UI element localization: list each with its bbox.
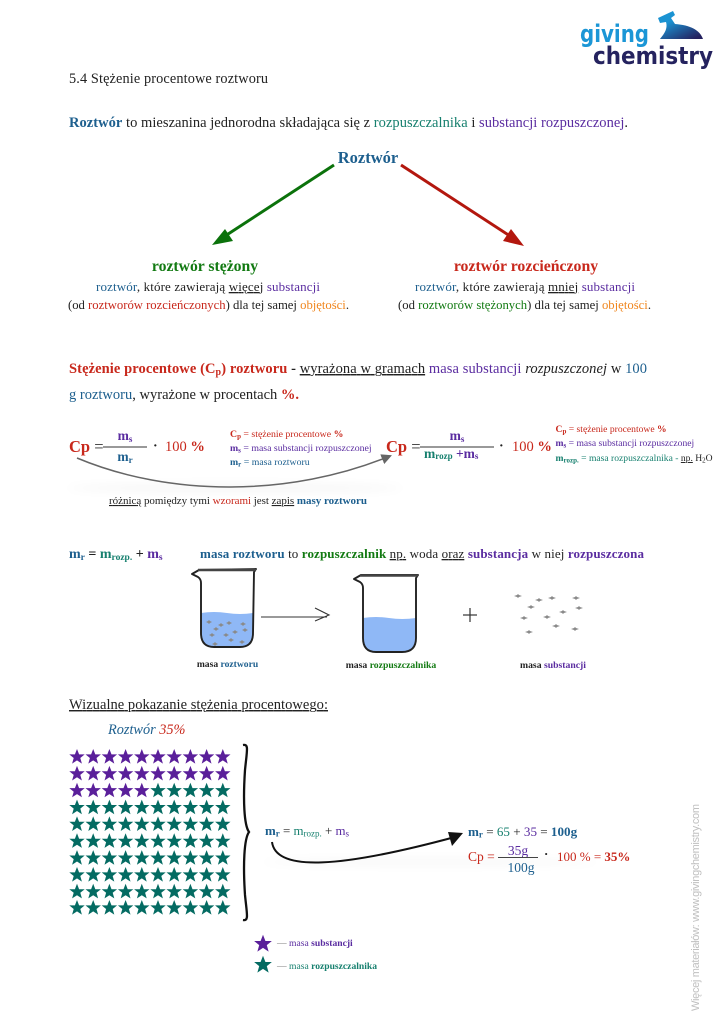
formula 2: m [450,428,461,443]
definition of percent concentration: p [216,367,222,378]
legend for formula 2: = masa rozpuszczalnika - [579,453,681,464]
formula 1: Cp = [69,437,104,456]
mass formula: = [85,547,100,562]
curved arrow between formulas [65,456,405,492]
formula 1: m [118,428,129,443]
formula 2: s [461,434,465,444]
curly brace [243,745,249,920]
calculation: m [468,824,483,840]
mass formula: r [81,553,86,563]
mass equation: m [265,824,280,838]
formula 1: · [153,439,158,454]
mass formula: s [159,553,163,563]
diluted solution text: (od roztworów stężonych) dla tej samej objętości. [398,298,651,312]
diluted solution text: roztwór, które zawierają mniej substancji [415,279,635,294]
diagram: solution types [68,148,651,312]
formula 1: m [117,449,129,464]
legend for formula 1: = masa substancji rozpuszczonej [241,443,372,454]
formula 2: m [424,446,435,461]
legend for formula 2 [556,424,713,464]
calculation [468,824,630,875]
plus sign [463,608,477,622]
legend for formula 1: p [237,432,241,440]
legend for formula 1: = stężenie procentowe [241,429,334,440]
definition of solution: Roztwór to mieszanina jednorodna składająca się z rozpuszczalnika i substancji rozpuszczonej. [69,115,628,131]
formula 2 [386,428,552,461]
mass equation: m [293,824,322,838]
calculation: = [483,824,497,839]
definition of percent concentration: - wyrażona w gramach masa substancji rozpuszczonej w 100 [291,361,647,377]
formula 2: +m [453,446,476,461]
formula 2: Cp = [386,437,421,456]
calculation: 100 % = 35% [557,849,630,864]
legend for formula 1: r [238,460,241,468]
substance particles [514,594,583,634]
legend for formula 2: % [657,424,667,435]
mass formula: m [69,547,86,563]
label: solution mass: masa roztworu [197,659,259,670]
logo: giving chemistry [580,11,713,70]
legend for formula 1: = masa roztworu [241,457,310,468]
legend: substance [254,935,353,952]
legend for formula 2: m [556,438,566,450]
diluted solution text [398,258,651,312]
mass formula: rozp. [112,553,132,563]
logo: giving chemistry: giving [580,20,649,48]
mass formula: m [147,547,163,563]
label: solvent mass: masa rozpuszczalnika [346,660,436,671]
formula 2: · [499,439,504,454]
calculation: · [544,846,548,861]
legend for formula 1: s [238,446,241,454]
arrow: beaker equals [261,608,329,621]
legend: solvent: — masa rozpuszczalnika [276,961,377,972]
mass equation: r [276,828,280,838]
formula 1: s [129,434,133,444]
calculation: 35g [508,843,528,858]
formula 2: rozp [435,451,453,461]
formula 2: 100 % [512,439,552,455]
vertical credit: Więcej materiałów: www.givingchemistry.com [690,804,702,1011]
legend for formula 2: rozp. [564,456,579,464]
legend for formula 2: p [562,428,566,436]
legend for formula 2: s [564,442,566,450]
concentrated solution text: roztwór, które zawierają więcej substancji [96,279,320,294]
legend for formula 2: = masa substancji rozpuszczonej [566,438,694,449]
mass equation: rozp. [304,828,322,838]
beaker diagram [192,569,586,671]
formula 1 [69,428,205,465]
calculation: r [479,830,483,840]
legend for formula 1 [230,429,372,468]
definition of percent concentration: g roztworu, wyrażone w procentach %. [69,387,299,403]
label: substance mass: masa substancji [520,660,586,671]
definition of percent concentration [69,361,647,403]
mass equation: + [322,824,335,838]
legend for formula 1: % [334,429,343,440]
calculation: Cp = [468,849,495,864]
beaker: solvent [354,575,418,652]
calculation: 65 + 35 = 100g [497,824,577,839]
mass equation: s [346,828,350,838]
arrow: to diluted [401,165,524,246]
calculation: 100g [508,860,535,875]
visual section heading: Wizualne pokazanie stężenia procentowego: [69,697,328,713]
mass formula: m [100,547,132,563]
mass equation: = [280,824,293,838]
definition of percent concentration: Stężenie procentowe (C [69,361,287,378]
heading: Roztwór: Roztwór [338,148,398,167]
mass formula: + [132,547,147,562]
legend for formula 1: m [230,443,241,454]
curved arrow to calculation [260,832,600,865]
arrow: to concentrated [212,165,334,245]
note about difference: różnicą pomiędzy tymi wzorami jest zapis masy roztworu [109,495,367,507]
diluted solution text: roztwór rozcieńczony [454,258,598,275]
legend: solvent [254,956,377,973]
legend for formula 2: = stężenie procentowe [566,424,657,435]
logo: giving chemistry: chemistry [593,42,713,70]
legend for formula 2: np. H [681,453,702,464]
concentrated solution text [68,258,349,312]
concentrated solution text: roztwór stężony [152,258,258,275]
formula 2: s [475,451,479,461]
mass description: masa roztworu to rozpuszczalnik np. woda oraz substancja w niej rozpuszczona [200,546,644,561]
legend for formula 2: 2 [702,456,706,464]
star grid [69,749,230,915]
section title: 5.4 Stężenie procentowe roztworu [69,71,268,87]
concentrated solution text: (od roztworów rozcieńczonych) dla tej samej objętości. [68,298,349,312]
legend for formula 1: m [230,457,241,468]
legend for formula 2: C [556,424,566,436]
solution 35 percent label: Roztwór 35% [107,722,186,738]
legend for formula 2: m [556,453,579,464]
legend: substance: — masa substancji [276,938,353,949]
beaker: solution [192,569,256,647]
formula 1: 100 % [165,439,205,455]
legend for formula 2: O [706,453,713,464]
definition of percent concentration: ) roztworu [221,361,287,377]
legend for formula 1: C [230,429,241,440]
formula 1: r [129,455,133,465]
mass equation: m [335,824,350,838]
